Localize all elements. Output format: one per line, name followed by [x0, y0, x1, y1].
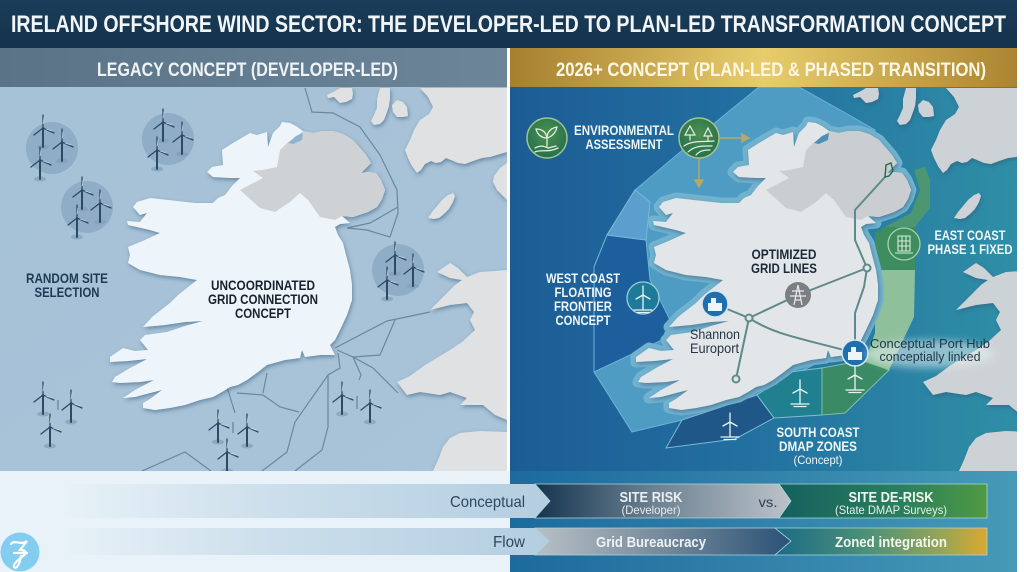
Northern Ireland — [240, 131, 385, 220]
left panel heading — [0, 48, 507, 87]
Ireland landmass with coastal glow — [636, 122, 911, 410]
row: conceptual: (State DMAP Surveys) — [835, 503, 947, 517]
row: conceptual: SITE RISK — [620, 489, 683, 506]
optimized grid lines — [715, 163, 893, 379]
label: south coast DMAP zones: SOUTH COAST — [776, 424, 860, 440]
turbines: southeast — [333, 382, 381, 424]
icon: fixed platform — [888, 228, 920, 260]
glow behind port hub label — [866, 340, 994, 368]
label: west coast floating frontier concept: FLOATING — [554, 284, 612, 300]
zone: south coast dark — [666, 395, 774, 448]
row: conceptual: Conceptual — [450, 494, 525, 511]
label: Shannon Europort: Shannon — [690, 326, 740, 342]
Lough Foyle — [814, 133, 829, 144]
label: optimized grid lines: OPTIMIZED — [752, 246, 816, 262]
grid nodes — [732, 264, 870, 382]
icon: pylon — [785, 282, 811, 308]
label: Shannon Europort: Europort — [690, 340, 739, 356]
label: west coast floating frontier concept: WEST COAST — [546, 270, 620, 286]
zone: northwest block — [607, 190, 650, 240]
zone: east coast phase 1 fixed — [875, 227, 915, 270]
label: environmental assessment: ASSESSMENT — [586, 136, 663, 152]
icon: floating turbine — [627, 282, 659, 314]
label: random site selection: RANDOM SITE — [26, 270, 108, 286]
row: conceptual — [60, 484, 987, 518]
left map — [0, 87, 507, 474]
right panel heading — [510, 48, 1017, 87]
label: conceptual port hub: conceptially linked — [880, 349, 980, 364]
turbine icon: south green zone — [846, 366, 864, 392]
right map — [510, 87, 1024, 471]
label: uncoordinated grid connection concept: CONCEPT — [235, 305, 291, 321]
turbine cluster: northwest 1 — [26, 115, 78, 182]
row: conceptual: (Developer) — [622, 503, 680, 517]
turbine cluster: northwest 2 — [142, 109, 194, 172]
label: west coast floating frontier concept: CONCEPT — [556, 312, 611, 328]
panel: comparison strip — [0, 471, 1017, 572]
label: environmental assessment: ENVIRONMENTAL — [574, 122, 674, 138]
arrows: assessment to coast — [695, 134, 749, 187]
label: random site selection: SELECTION — [34, 284, 100, 300]
icon: logo badge — [0, 532, 40, 572]
label: uncoordinated grid connection concept: UNCOORDINATED — [211, 277, 315, 293]
panel: legacy concept map — [0, 48, 507, 474]
turbine cluster: west — [61, 177, 113, 240]
Lough Foyle — [288, 133, 303, 144]
label: south coast DMAP zones: (Concept) — [794, 453, 843, 467]
label: east coast phase 1 fixed: EAST COAST — [934, 227, 1006, 243]
icon: east port hub — [842, 340, 868, 366]
row: conceptual: SITE DE-RISK — [848, 489, 934, 506]
uncoordinated cables — [142, 88, 430, 471]
turbine icon: south teal zone — [791, 380, 809, 406]
row: flow: Grid Bureaucracy — [596, 534, 707, 551]
panel: 2026+ concept map — [510, 48, 1024, 471]
label: optimized grid lines: GRID LINES — [751, 260, 817, 276]
zone: east coast upper strip — [885, 167, 930, 227]
zone: east coast pale — [865, 270, 915, 370]
row: conceptual: vs. — [758, 494, 778, 510]
turbine icon: south dark zone — [721, 413, 739, 440]
zone: south coast teal — [757, 368, 822, 418]
row: flow — [60, 528, 987, 555]
row: flow: Zoned integration — [835, 534, 947, 551]
left panel heading: LEGACY CONCEPT (DEVELOPER-LED) — [97, 60, 398, 81]
label: south coast DMAP zones: DMAP ZONES — [779, 438, 857, 454]
label: uncoordinated grid connection concept: GRID CONNECTION — [208, 291, 318, 307]
label: west coast floating frontier concept: FRONTIER — [554, 298, 612, 314]
zone: west coast floating frontier — [594, 235, 670, 372]
zone: south coast green — [822, 360, 889, 415]
label: conceptual port hub: Conceptual Port Hub — [870, 336, 990, 351]
turbines: south — [209, 410, 258, 474]
Northern Ireland — [766, 131, 911, 220]
icon: environmental assessment hand and plant — [527, 118, 567, 158]
Ireland landmass — [110, 122, 385, 410]
turbine cluster: east — [372, 242, 424, 302]
title banner — [0, 0, 1017, 48]
turbines: southwest — [34, 382, 82, 448]
row: flow: Flow — [493, 534, 525, 551]
icon: landscape with trees — [679, 118, 719, 158]
icon: Shannon port — [702, 291, 728, 317]
zone: outer coastal band — [594, 87, 875, 432]
